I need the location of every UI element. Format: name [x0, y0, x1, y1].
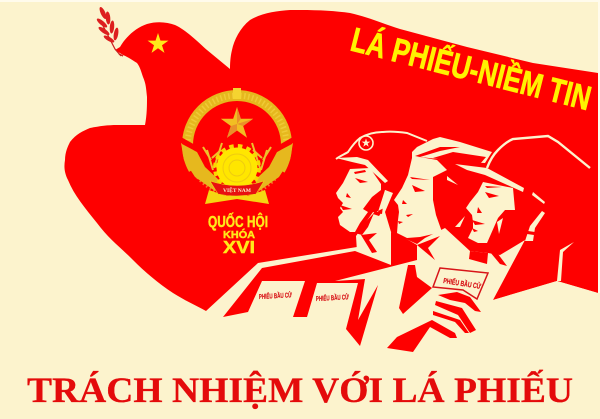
ballot: held card: PHIẾU BẦU CỬ: [443, 275, 482, 291]
olive branch: [96, 6, 123, 56]
jacket: [399, 265, 432, 314]
red sleeve band and card frames: [223, 232, 417, 346]
hat: woman: [412, 137, 492, 163]
hand: [387, 292, 481, 352]
dove silhouette: [64, 10, 598, 311]
face: soldier one: [336, 168, 381, 232]
ballot label: card one: PHIẾU BẦU CỬ: [259, 289, 292, 301]
collars: [355, 211, 535, 266]
label: Quốc hội khóa XVI: [208, 211, 268, 257]
figures: three voters: [206, 132, 600, 419]
national emblem: VIỆT NAM: [223, 186, 252, 194]
label: Quốc hội khóa XVI: KHÓA: [223, 228, 255, 241]
helmet: soldier one: [336, 132, 427, 183]
ballot: held card: [433, 268, 488, 299]
label: Quốc hội khóa XVI: XVI: [223, 237, 255, 257]
label: Quốc hội khóa XVI: QUỐC HỘI: [208, 211, 268, 231]
title: TRÁCH NHIỆM VỚI LÁ PHIẾU: [27, 370, 573, 410]
face: soldier three: [466, 182, 515, 243]
bodies: [206, 190, 600, 419]
neck and strap: soldier one: [356, 190, 393, 266]
helmet: soldier three: [447, 136, 590, 281]
face: woman: [394, 157, 447, 238]
dove star: [148, 33, 168, 53]
ballot label: card two: PHIẾU BẦU CỬ: [316, 291, 349, 303]
hat stripes: [415, 147, 486, 164]
national emblem: [181, 88, 293, 204]
facial features: [340, 170, 502, 232]
